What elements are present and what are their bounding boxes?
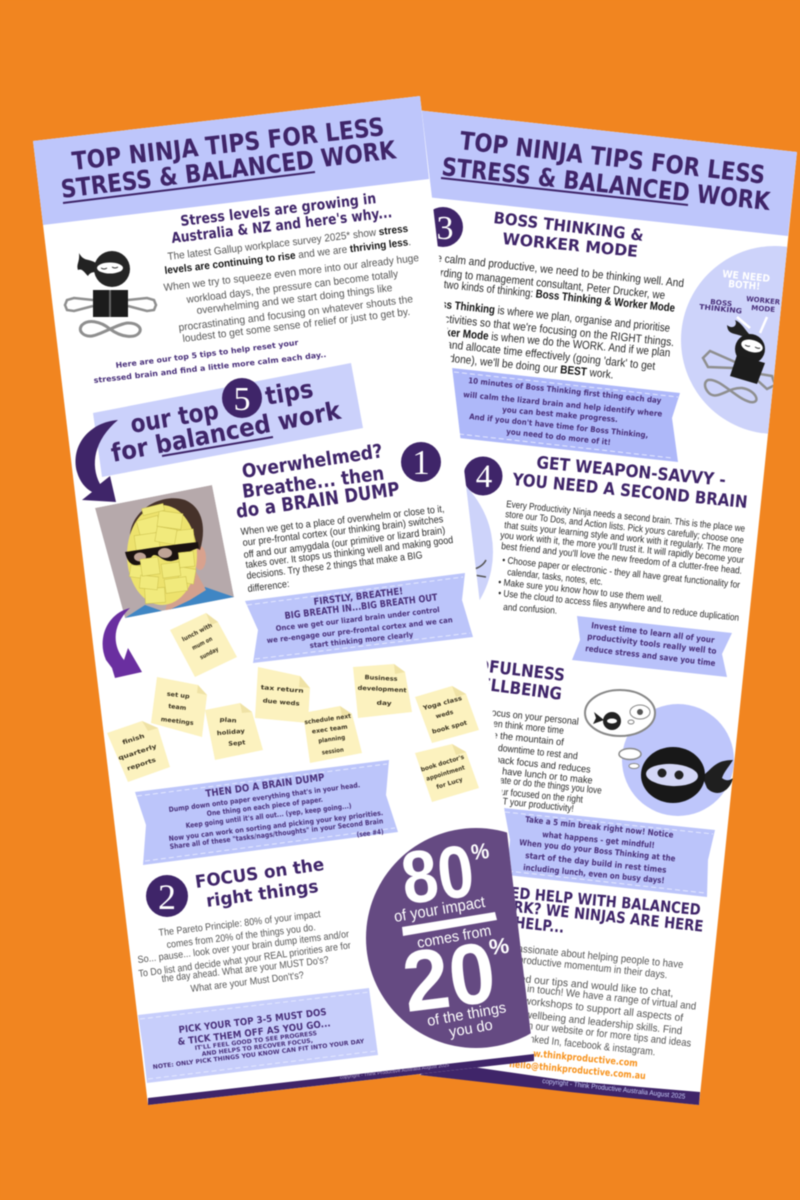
section 5 body text (460, 705, 603, 815)
illustration: we need both ninja (681, 246, 800, 434)
callout: then do a brain dump: Dump down onto paper everything that's in your head. (168, 781, 361, 814)
callout: pick your top 3-5 must dos: PICK YOUR TOP 3-5 MUST DOS (178, 1007, 327, 1036)
callout: then do a brain dump: THEN DO A BRAIN DUMP (205, 772, 325, 800)
section 4 body text: best friend and you'll love the new freedom of a clutter-free head. (501, 541, 743, 577)
section 5 body text: stress. to have lunch or to make (462, 762, 594, 787)
section 4 body text: • Make sure you know how to use them well. (498, 577, 664, 605)
section 1 body text: difference: (247, 579, 290, 595)
panel: right page (419, 110, 798, 1106)
arrow: to tip 1 (76, 420, 118, 502)
callout: firstly breathe: FIRSTLY, BREATHE! (313, 586, 404, 608)
note: book doctor's appointment: book doctor's (420, 754, 465, 773)
panel: left page (33, 96, 586, 1105)
callout: ten minutes of boss thinking (452, 368, 680, 462)
illustration: we need both ninja: WE NEED (722, 269, 771, 285)
section 4 body text: calendar, tasks, notes, etc. (507, 567, 603, 588)
intro body text: When we try to squeeze even more into our already huge (163, 252, 420, 294)
note: yoga class: book spot (431, 719, 468, 736)
note: plan holiday Sept: plan (219, 716, 237, 725)
section 4 body text: you work with it, the more you'll trust it. It will rapidly become your (500, 530, 745, 566)
section 5 body text: to tackle the mountain of (463, 727, 565, 749)
note: schedule next exec team planning session: planning (318, 734, 346, 745)
section 1 body text: off and our amygdala (our primitive or lizard brain) (243, 525, 446, 561)
illustration: thinking ninja (585, 690, 734, 816)
illustration: we need both ninja: THINKING (699, 303, 743, 316)
note: lunch with mum (170, 613, 237, 677)
callout: pick your top 3-5 must dos (138, 988, 378, 1083)
left page title: STRESS & BALANCED WORK (59, 135, 399, 204)
banner: our top 5 tips: tips (263, 374, 315, 411)
callout: invest time (572, 616, 732, 677)
note: book doctor's appointment: appointment (425, 764, 466, 783)
note: schedule next exec team planning session: session (321, 747, 344, 757)
closing heading: TO HELP... (490, 911, 565, 937)
intro body text: procrastinating and focusing on whatever shouts the (178, 293, 414, 334)
closing heading: NEED HELP WITH BALANCED (490, 882, 702, 919)
callout: then do a brain dump: Keep going until it's all out... (yep, keep going...) (185, 802, 352, 830)
intro body text: workload days, the pressure can become totally (185, 268, 399, 306)
note: set up team meetings: team (168, 703, 187, 712)
section 2 number badge (146, 875, 188, 917)
section 2 body text: the day ahead. What are your MUST Do's? (161, 955, 330, 985)
section 4 body text: • Use the cloud to access files anywhere and to reduce duplication (498, 588, 740, 624)
stat circle: 80% of impact from 20%: of the things (426, 999, 507, 1030)
callout: pick your top 3-5 must dos: AND HELPS TO RECOVER FOCUS, (201, 1037, 313, 1058)
callout: take a break: Take a 5 min break right now! Notice (525, 814, 674, 840)
callout: then do a brain dump: One thing on each piece of paper. (206, 796, 323, 818)
section 4 body text: store our To Dos, and Action lists. Pick yours carefully; choose one (505, 509, 744, 546)
section 3 heading (493, 208, 645, 261)
section 4 body text: and confusion. (503, 602, 557, 617)
note: finish quarterly reports: finish (122, 733, 146, 746)
illustration: we need both ninja: WORKER (746, 295, 781, 307)
section 3 number badge: 3 (436, 210, 454, 247)
section 4 body text (498, 499, 746, 624)
stat circle: 80% of impact from 20%: you do (448, 1017, 494, 1041)
section 1 body text: our pre-frontal cortex (our thinking brain) switches (242, 514, 444, 549)
section 2 body text: The Pareto Principle: 80% of your impact (158, 909, 321, 939)
callout: pick your top 3-5 must dos: & TICK THEM OFF AS YOU GO... (177, 1018, 331, 1048)
stat circle: 80% of impact from 20%: comes from (416, 922, 493, 952)
section 2 heading: right things (205, 877, 320, 912)
closing body text: We are passionate about helping people to have (479, 939, 684, 971)
section 3 body text (417, 251, 685, 381)
intro body text (163, 223, 420, 345)
intro lead-in: Here are our top 5 tips to help reset your (115, 338, 299, 370)
hidden lavender circle with sketch (307, 459, 493, 645)
illustration: we need both ninja: MODE (751, 304, 776, 314)
callout: ten minutes of boss thinking: you can best make progress. (502, 405, 618, 424)
note: set up team meetings: meetings (160, 716, 194, 727)
intro body text: loudest to get some sense of relief or just to get by. (182, 306, 411, 345)
section 3 body text: To be calm and productive, we need to be thinking well. And (417, 251, 685, 290)
section 5 body text: meditate or do the things you love (480, 773, 603, 797)
section 3 body text: have two kinds of thinking: Boss Thinking & Worker Mode (420, 277, 676, 315)
closing body text: please get in touch! We have a range of virtual and (480, 978, 697, 1013)
section 5 heading: MINDFULNESS (442, 652, 566, 686)
stat circle: 80% of impact from 20% (365, 827, 532, 1049)
section 4 heading (511, 453, 748, 513)
callout: ten minutes of boss thinking: And if you don't have time for Boss Thinking, (469, 412, 649, 440)
note: yoga class (415, 686, 479, 743)
section 3 body text: Worker Mode is when we do the WORK. And if we plan (426, 325, 671, 360)
note: tax return due weds: due weds (262, 697, 300, 708)
note: schedule next exec team planning session (303, 706, 362, 763)
section 4 number badge (464, 456, 502, 496)
callout: take a break: what happens - get mindful! (542, 829, 655, 850)
section 2 heading (194, 855, 326, 912)
intro body text: overwhelming and we start doing things like (196, 282, 393, 317)
closing heading: WORK? WE NINJAS ARE HERE (487, 895, 704, 936)
note: lunch with mum: mum on (191, 636, 214, 652)
section 2 body text: What are your Must Don't's? (190, 970, 305, 995)
left page footer band: copyright - Think Productive Australia August 2025 (340, 1062, 450, 1080)
callout: firstly breathe: we re-engage our pre-frontal cortex and we can (266, 615, 453, 645)
left page sheet (33, 96, 534, 1105)
note: plan holiday Sept: Sept (228, 739, 246, 748)
stat circle: 80% of impact from 20%: 20 (398, 924, 501, 1031)
section 4 body text: Every Productivity Ninja needs a second brain. This is the place we (506, 499, 746, 535)
stat circle: 80% of impact from 20%: 80 (397, 829, 478, 920)
section 4 number badge: 4 (476, 459, 492, 495)
intro body text: The latest Gallup workplace survey 2025* show stress (167, 223, 409, 263)
section 2 number badge: 2 (158, 877, 176, 917)
section 1 body text: When we get to a place of overwhelm or close to it, (240, 504, 445, 538)
note: business development day (353, 664, 412, 718)
section 4 heading: GET WEAPON-SAVVY - (536, 453, 727, 491)
intro body text: levels are continuing to rise and we are thriving less. (164, 236, 412, 277)
section 5 body text: Don't focus on your personal (466, 705, 579, 728)
callout: then do a brain dump: Share all of these "tasks/nags/thoughts" in your Second Brain (169, 817, 384, 851)
note: yoga class: Yoga class (421, 695, 463, 712)
section 3 heading: BOSS THINKING & (493, 208, 645, 245)
note: finish quarterly reports: reports (126, 756, 157, 773)
note: tax return due weds: tax return (260, 684, 304, 695)
note: lunch with mum: sunday (199, 646, 220, 661)
illustration: we need both ninja: BOTH! (728, 279, 761, 293)
section 5 body text: GET your productivity! (490, 795, 574, 815)
left page footer band (148, 1054, 534, 1105)
section 2 body text: comes from 20% of the things you do. (166, 922, 316, 951)
note: schedule next exec team planning session: schedule next (304, 713, 352, 726)
intro heading: Australia & NZ and here's why... (171, 205, 393, 247)
photo: man covered in sticky notes (95, 485, 240, 625)
section 1 body text (240, 504, 454, 595)
callout: take a break: When you do your Boss Thinking at the (519, 837, 676, 863)
callout: take a break: including lunch, even on busy days! (523, 862, 665, 885)
closing body text (468, 939, 697, 1058)
section 4 body text: that suits your learning style and work with it regularly. The more (504, 520, 743, 556)
callout: pick your top 3-5 must dos: IT'LL FEEL GOOD TO SEE PROGRESS (194, 1030, 317, 1052)
callout: firstly breathe: Once we get our lizard brain under control (275, 605, 440, 633)
right page title (440, 126, 773, 216)
contact links (509, 1047, 646, 1082)
note: set up team meetings: set up (166, 691, 191, 700)
section 4 body text: • Choose paper or electronic - they all have great functionality for (502, 555, 741, 591)
intro heading: Stress levels are growing in (180, 191, 377, 230)
closing body text: face to face workshops to support all aspects of (468, 989, 684, 1024)
note: set up team meetings (151, 677, 207, 737)
left page title: TOP NINJA TIPS FOR LESS (70, 112, 386, 176)
section 1 heading (235, 440, 401, 523)
section 4 heading: YOU NEED A SECOND BRAIN (511, 470, 748, 513)
section 1 number badge (401, 442, 441, 482)
banner: our top 5 tips (93, 363, 363, 477)
section 5 heading: & WELLBEING (444, 670, 563, 705)
section 3 heading: WORKER MODE (502, 229, 639, 261)
callout: pick your top 3-5 must dos: NOTE: ONLY PICK THINGS YOU KNOW CAN FIT INTO YOUR DAY (152, 1038, 365, 1071)
callout: firstly breathe: BIG BREATH IN...BIG BREATH OUT (284, 592, 439, 622)
callout: invest time: productivity tools really well to (587, 631, 717, 656)
stat circle: 80% of impact from 20%: % (470, 838, 490, 865)
note: lunch with mum: lunch with (181, 622, 214, 643)
section 1 number badge: 1 (412, 443, 430, 482)
note: business development day: Business (364, 674, 398, 683)
note: plan holiday Sept (205, 703, 263, 760)
contact links: hello@thinkproductive.com.au (509, 1059, 646, 1082)
callout: firstly breathe: start thinking more clearly (309, 630, 414, 650)
closing body text: If you loved our tips and would like to chat, (478, 969, 674, 999)
section 5 body text: Use your downtime to rest and (461, 739, 578, 762)
illustration: meditating ninja (65, 251, 156, 336)
callout: then do a brain dump: (see #4) (356, 828, 384, 839)
sticky notes (107, 613, 479, 802)
callout: then do a brain dump: Now you can work on sorting and picking your key priorities. (168, 809, 384, 843)
illustration: we need both ninja: BOSS (710, 298, 733, 308)
note: finish quarterly reports: quarterly (117, 743, 158, 762)
stat circle: 80% of impact from 20%: of your impact (393, 894, 487, 926)
closing heading (487, 882, 704, 937)
intro lead-in (93, 338, 327, 385)
stat circle: 80% of impact from 20%: % (488, 933, 510, 960)
right page footer band (420, 1061, 700, 1105)
note: schedule next exec team planning session: exec team (311, 724, 348, 735)
section 1 heading: Overwhelmed? (240, 440, 384, 483)
left page header band (33, 96, 429, 225)
section 2 body text: To Do list and decide what your REAL priorities are for (138, 940, 352, 980)
section 3 body text: Boss Thinking is where we plan, organise and prioritise (428, 298, 671, 335)
section 3 body text: our activities so that we're focusing on the RIGHT things. (421, 311, 675, 349)
section 5 body text: and then think more time (469, 716, 565, 737)
right page sheet (380, 106, 797, 1105)
callout: then do a brain dump (135, 760, 398, 865)
callout: ten minutes of boss thinking: you need to do more of it! (506, 427, 611, 447)
closing body text: productivity, wellbeing and leadership skills. Find (470, 1003, 683, 1037)
section 3 body text: it done), we'll be doing our BEST work. (441, 352, 614, 381)
section 2 body text (137, 909, 352, 995)
note: tax return due weds (255, 667, 310, 723)
section 3 body text: and allocate time effectively (going 'dark' to get (446, 339, 656, 373)
note: yoga class: weds (435, 709, 455, 720)
section 1 heading: Breathe... then (241, 462, 385, 503)
closing body text: follow us on Linked In, facebook & instagram. (471, 1027, 656, 1058)
closing body text: find productive momentum in their days. (500, 952, 668, 981)
section 2 body text: So... pause... look over your brain dump items and/or (137, 929, 350, 966)
intro lead-in: stressed brain and find a little more calm each day.. (93, 350, 327, 385)
callout: firstly breathe (245, 573, 473, 663)
note: book doctor's appointment: for Lucy (436, 776, 464, 791)
right page header band (380, 106, 797, 236)
note: business development day: development (357, 685, 407, 694)
banner: our top 5 tips: 5 (234, 381, 250, 418)
contact links: www.thinkproductive.com (518, 1047, 638, 1069)
closing body text: out more on our website or for more tips and ideas (483, 1015, 692, 1050)
section 2 heading: FOCUS on the (194, 855, 326, 893)
right page footer band: copyright - Think Productive Australia August 2025 (542, 1078, 686, 1101)
section 1 body text: takes over. It stops us thinking well and making good (245, 535, 454, 571)
callout: take a break: start of the day build in rest times (525, 850, 667, 875)
callout: ten minutes of boss thinking: will calm the lizard brain and help identify where (463, 390, 663, 419)
note: business development day: day (376, 700, 392, 707)
arrow: to sticky notes (103, 608, 142, 678)
callout: invest time: Invest time to learn all of your (591, 620, 716, 645)
section 5 body text: your focused on the right (492, 786, 584, 806)
banner: our top 5 tips: our top (128, 396, 221, 439)
section 5 heading (442, 652, 566, 705)
section 3 body text: According to management consultant, Peter Drucker, we (418, 265, 666, 302)
banner: our top 5 tips: for balanced work (109, 396, 344, 468)
section 3 number badge (423, 207, 463, 247)
section 1 body text: decisions. Try these 2 things that make a BIG (246, 550, 423, 582)
note: finish quarterly reports (107, 721, 170, 782)
callout: take a break (504, 808, 715, 897)
note: plan holiday Sept: holiday (217, 728, 245, 737)
section 5 body text: It brings back focus and reduces (460, 751, 591, 776)
callout: ten minutes of boss thinking: 10 minutes of Boss Thinking first thing each day (468, 376, 662, 405)
section 1 heading: do a BRAIN DUMP (235, 478, 401, 523)
note: book doctor's appointment (415, 744, 479, 802)
callout: invest time: reduce stress and save you time (585, 643, 716, 668)
